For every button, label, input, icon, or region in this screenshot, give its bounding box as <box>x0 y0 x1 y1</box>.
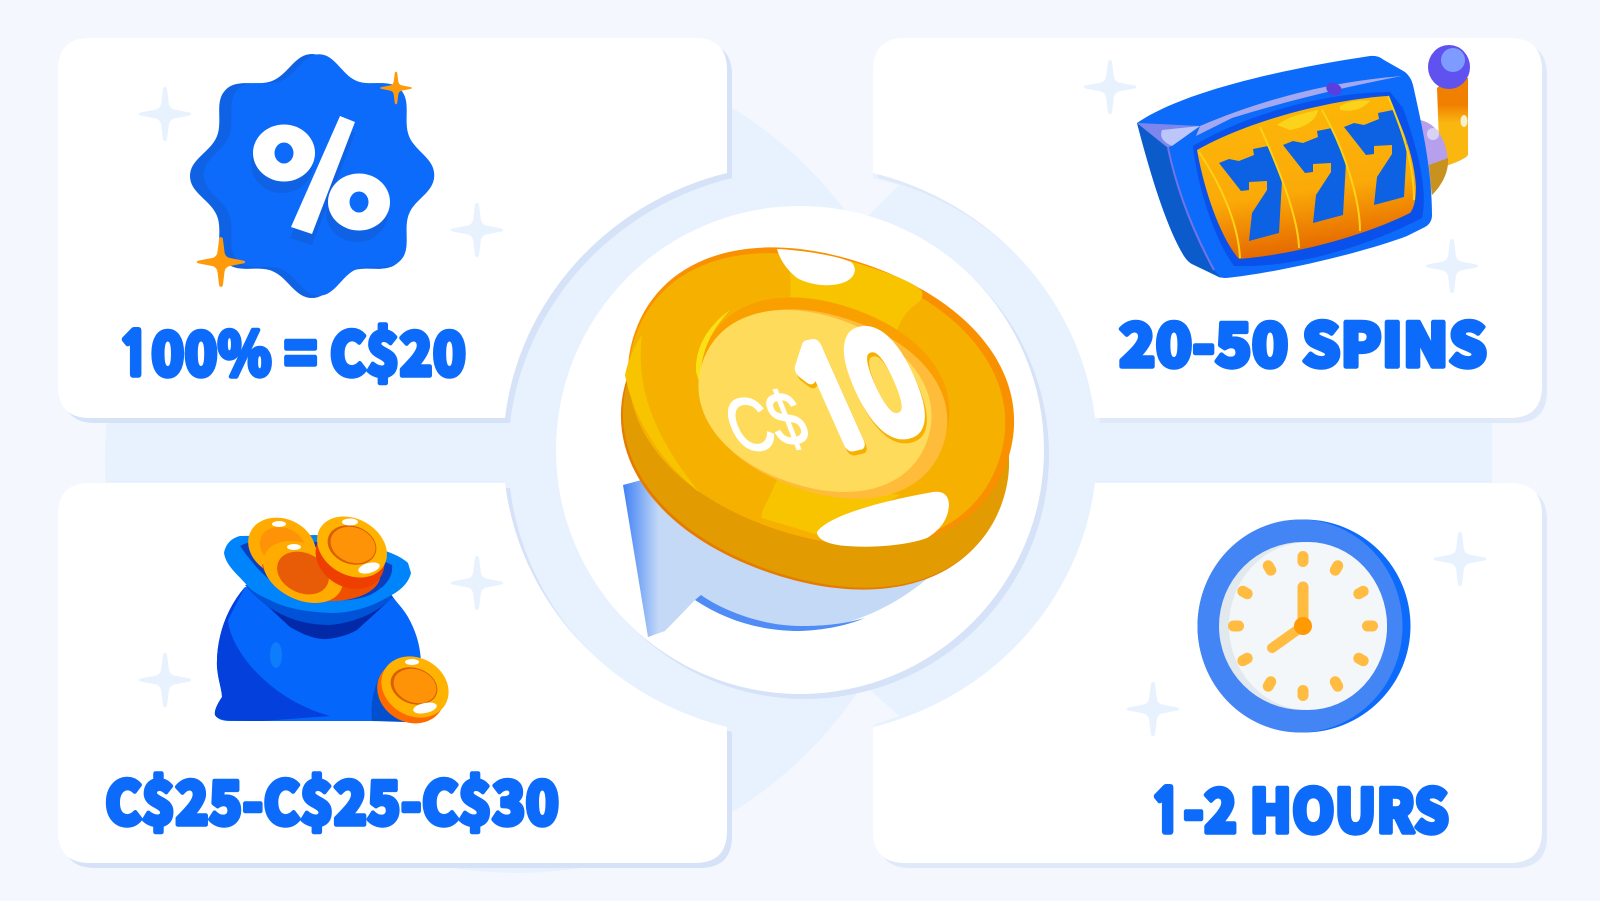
background shapes behind panels <box>105 47 1492 873</box>
icon: sparkle <box>1084 60 1136 114</box>
icon: sparkle <box>139 87 191 141</box>
label: C$25-C$25-C$30: C$25-C$25-C$30 <box>105 756 559 842</box>
label: 20-50 SPINS: 20-50 SPINS <box>1119 298 1487 384</box>
icon: sparkle <box>139 653 191 707</box>
icon: sparkle <box>451 556 503 610</box>
label: 1-2 HOURS: 1-2 HOURS <box>1150 764 1449 850</box>
icon: sparkle <box>1434 532 1486 586</box>
icon: gold coin C$10 <box>582 200 1053 637</box>
label: 10 shadow: 10 <box>775 321 943 476</box>
label: 100% = C$20: 100% = C$20 <box>118 306 466 394</box>
icon: percent badge <box>190 54 434 298</box>
icon: sparkle <box>1426 239 1478 293</box>
panel: bonus percent <box>58 38 732 423</box>
icon: sparkle <box>451 203 503 257</box>
panel: withdrawal time <box>873 483 1547 868</box>
label: 10: 10 <box>773 317 941 472</box>
centre circle <box>556 206 1049 699</box>
icon: clock <box>1198 520 1410 732</box>
panel: wagering deposits <box>58 483 732 868</box>
panel: free spins <box>873 38 1547 423</box>
icon: sparkle <box>1127 682 1179 736</box>
icon: speech bubble tail shadow <box>623 475 937 637</box>
icon: coin bag <box>215 504 460 735</box>
icon: slot machine <box>1137 45 1470 278</box>
label: C$: C$ <box>713 375 819 469</box>
